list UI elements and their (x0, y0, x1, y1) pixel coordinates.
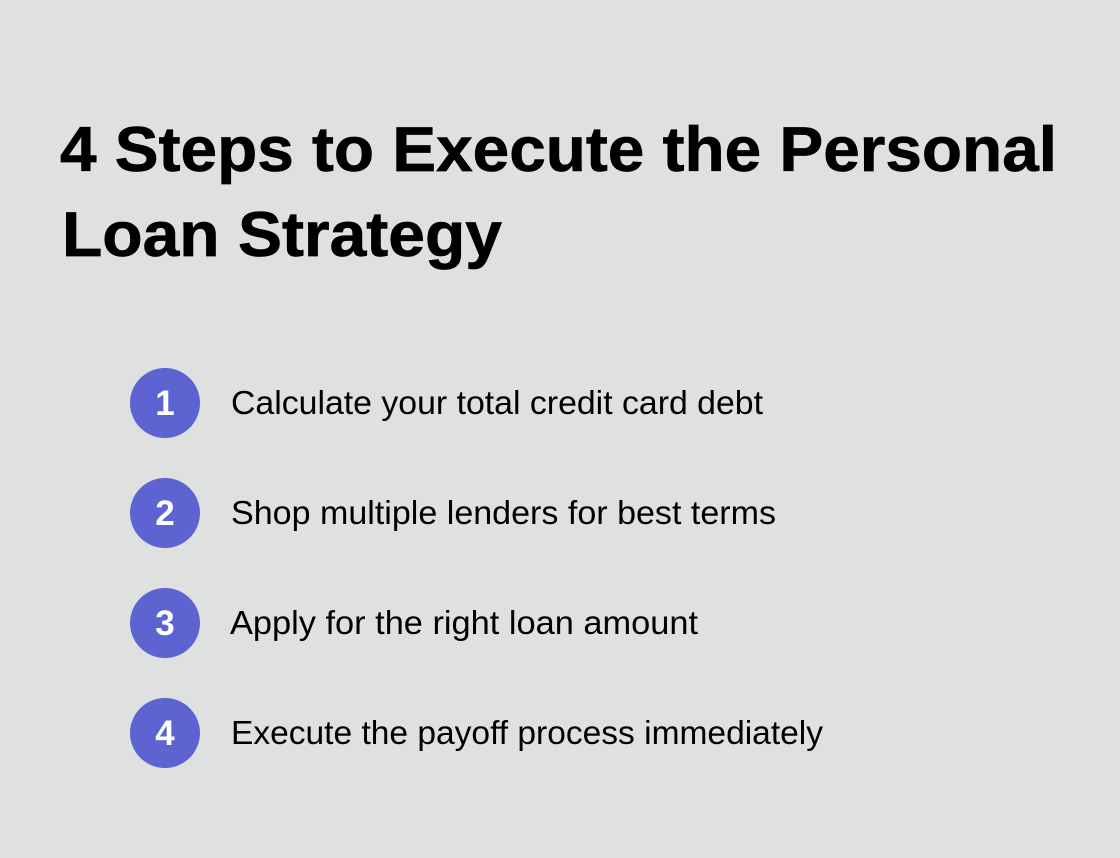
title: Loan Strategy (62, 200, 502, 270)
icon: number 4 badge (130, 698, 200, 768)
step 3 text: Apply for the right loan amount (230, 604, 698, 641)
step 4 text: Execute the payoff process immediately (231, 714, 823, 751)
step 4 (130, 698, 823, 768)
icon: number 2 badge (130, 478, 200, 548)
title (60, 115, 1057, 270)
step 3 (130, 588, 698, 658)
icon: number 2 badge: 2 (155, 494, 175, 533)
icon: number 4 badge: 4 (155, 714, 175, 753)
icon: number 1 badge (130, 368, 200, 438)
step 1 text: Calculate your total credit card debt (231, 384, 763, 421)
icon: number 3 badge (130, 588, 200, 658)
title: 4 Steps to Execute the Personal (60, 115, 1057, 185)
step 2 (130, 478, 776, 548)
step 1 (130, 368, 763, 438)
icon: number 1 badge: 1 (155, 384, 175, 423)
icon: number 3 badge: 3 (155, 604, 175, 643)
step 2 text: Shop multiple lenders for best terms (231, 494, 776, 531)
